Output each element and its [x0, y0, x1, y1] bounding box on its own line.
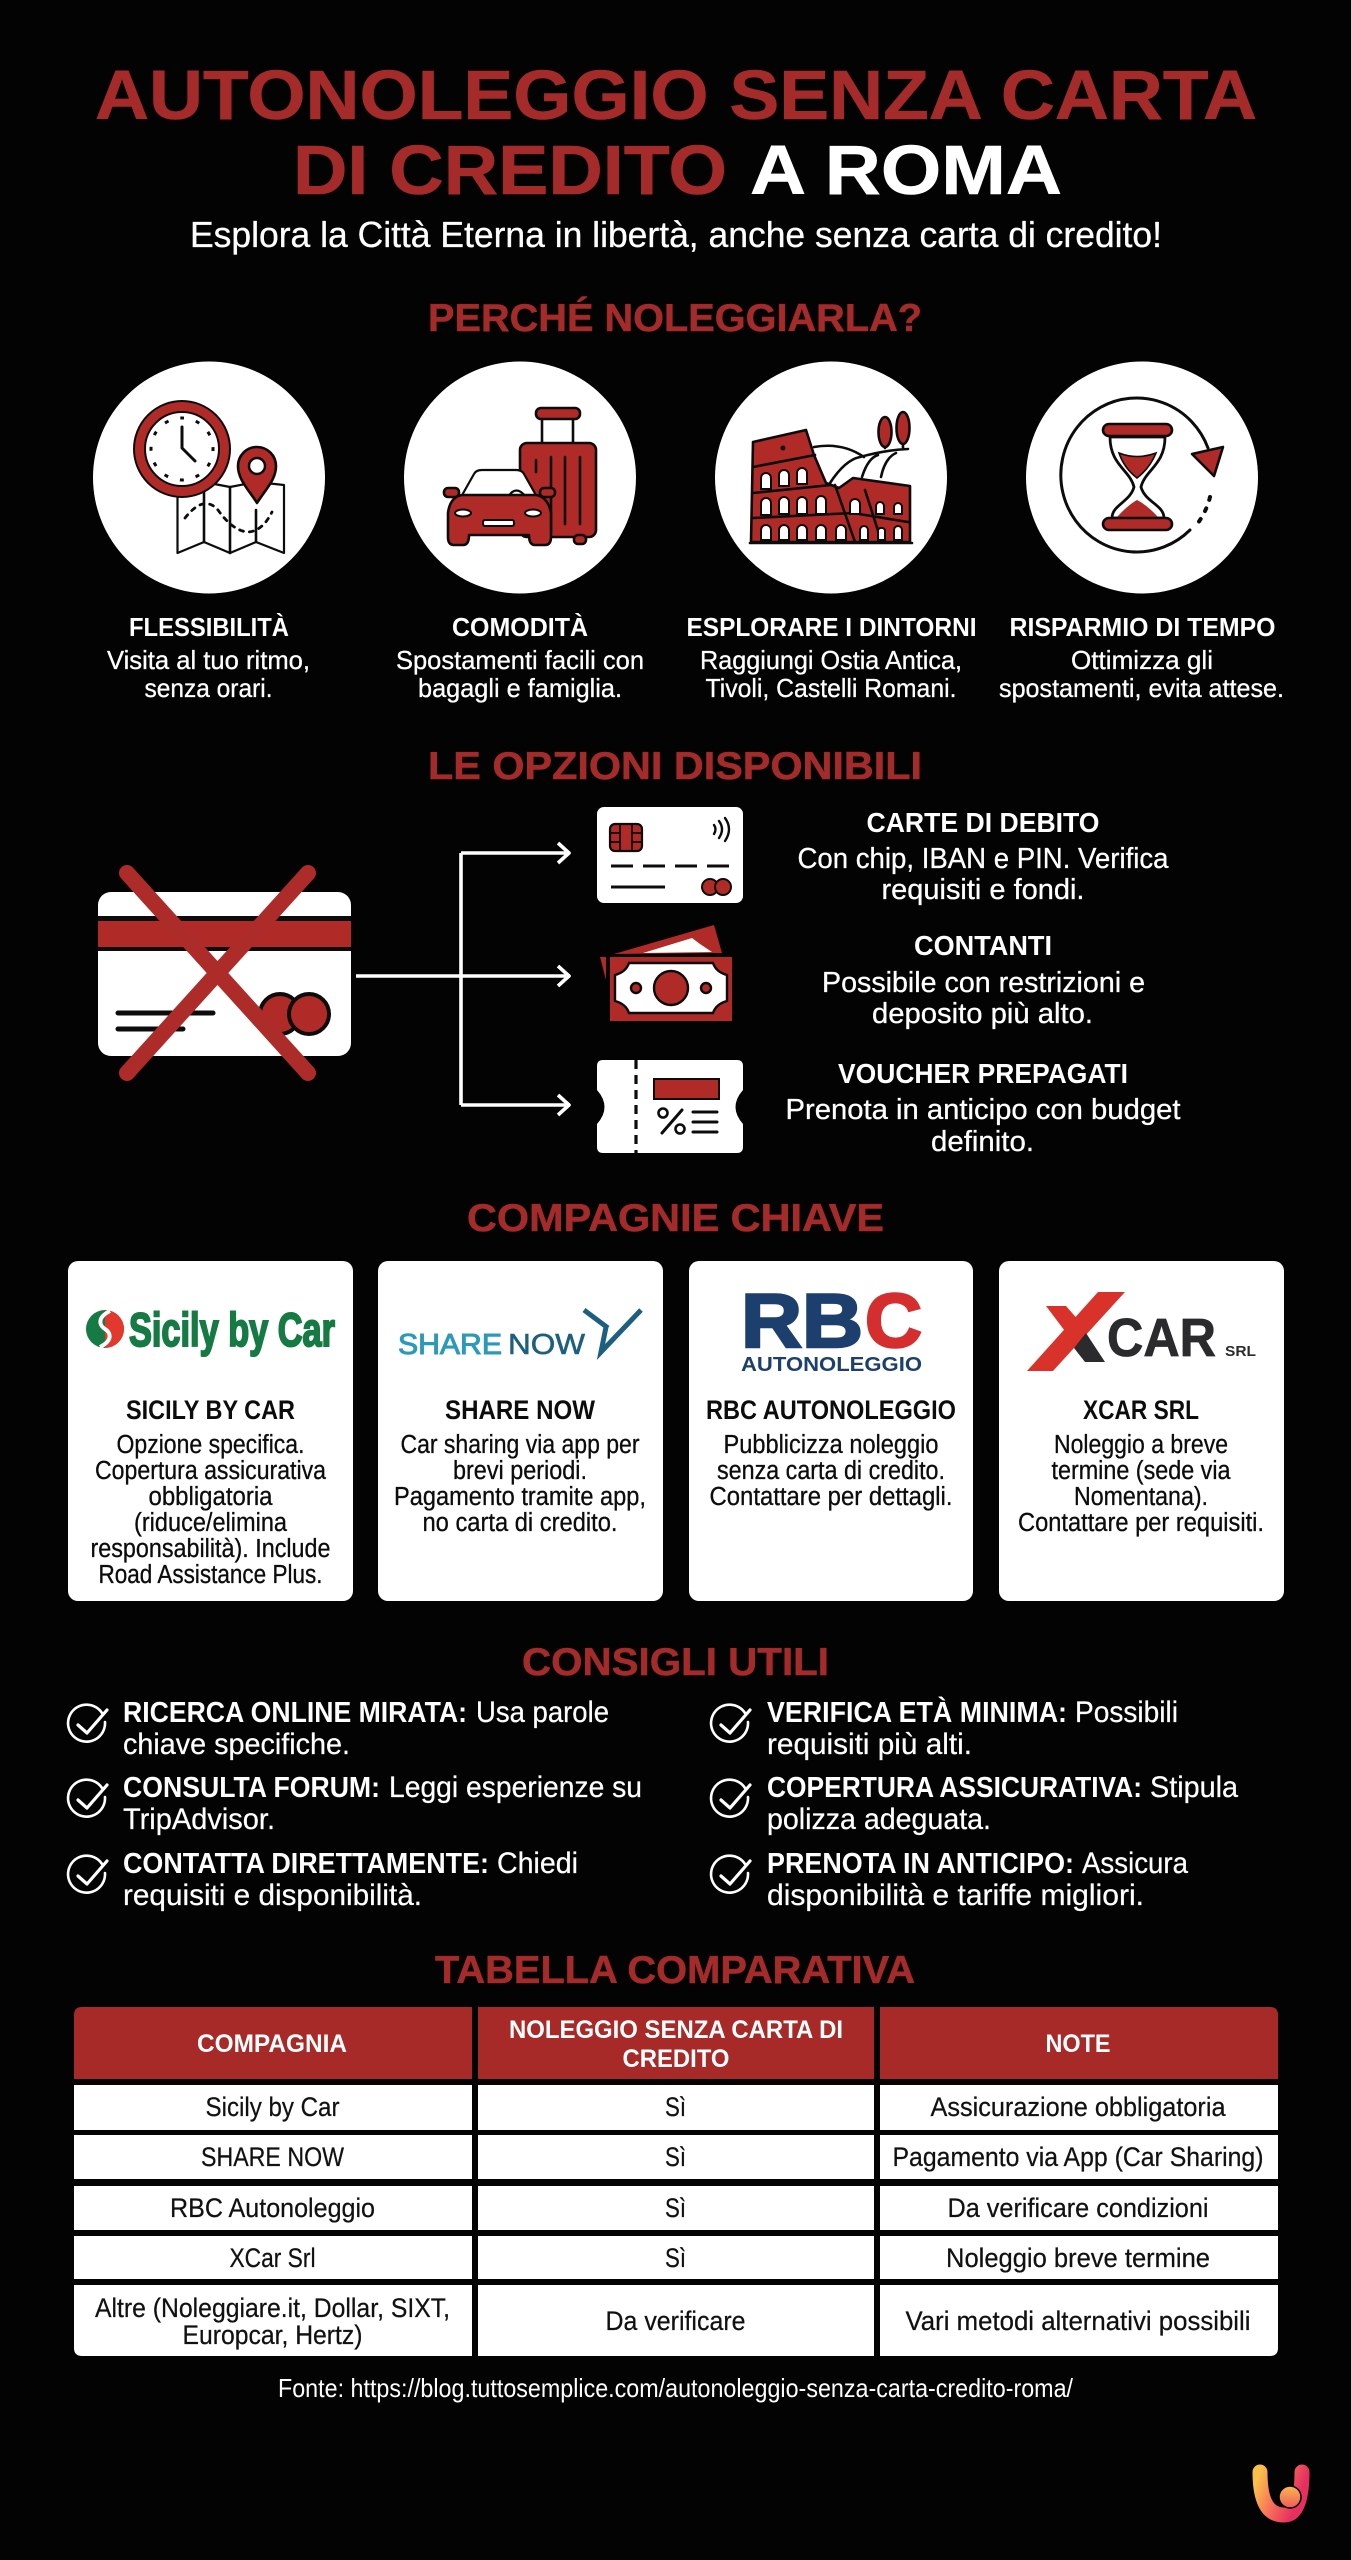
icon: brand logo: [1260, 2472, 1302, 2515]
text: XCar Srl: Contattare per requisiti.: [1018, 1509, 1264, 1537]
text: cash: deposito più alto.: [872, 998, 1093, 1030]
card: Sicily by Car: [68, 1261, 353, 1601]
label: flessibilità: Visita al tuo ritmo,: [107, 645, 310, 675]
text: Sicily by Car: [90, 1395, 330, 1589]
row: RBC Autonoleggio: [74, 2186, 1278, 2230]
icon: crossed-out credit card: [98, 873, 351, 1073]
text: Share Now: [394, 1395, 646, 1537]
icon: car and suitcase: [404, 362, 636, 594]
arrows: card to options: [356, 843, 569, 1115]
tip: contatta direttamente: CONTATTA DIRETTAMENTE:: [123, 1848, 489, 1880]
tip: consulta forum: CONSULTA FORUM:: [123, 1772, 380, 1804]
logo: RBC Autonoleggio: C: [865, 1279, 922, 1364]
row: altre compagnie: Vari metodi alternativi possibili: [906, 2306, 1250, 2336]
label: comodità: [396, 612, 644, 703]
row: XCar Srl: Noleggio breve termine: [946, 2243, 1210, 2273]
logo: XCar Srl: [1027, 1292, 1256, 1371]
row: altre compagnie: Altre (Noleggiare.it, Dollar, SIXT,: [95, 2293, 450, 2323]
title: [95, 56, 1257, 209]
label: comodità: Spostamenti facili con: [396, 645, 644, 675]
logo: Share Now: NOW: [508, 1329, 586, 1361]
text: Sicily by Car: SICILY BY CAR: [126, 1395, 295, 1425]
label: flessibilità: FLESSIBILITÀ: [129, 612, 289, 642]
logo: XCar Srl: SRL: [1225, 1343, 1256, 1360]
logo: Sicily by Car: Sicily by Car: [129, 1303, 335, 1356]
panel: comodità: [396, 362, 644, 703]
label: risparmio di tempo: [999, 612, 1284, 703]
text: RBC Autonoleggio: senza carta di credito.: [717, 1457, 945, 1485]
text: XCar Srl: Noleggio a breve: [1054, 1431, 1228, 1459]
logo: Share Now: SHARE: [398, 1329, 502, 1361]
logo: RBC Autonoleggio: AUTONOLEGGIO: [741, 1354, 922, 1376]
row: XCar Srl: XCar Srl: [230, 2243, 316, 2273]
tip: prenota in anticipo: disponibilità e tariffe migliori.: [767, 1879, 1144, 1912]
text: Sicily by Car: (riduce/elimina: [134, 1509, 288, 1537]
option: prepaid vouchers: [597, 1058, 1180, 1158]
row: XCar Srl: [74, 2236, 1278, 2279]
label: risparmio di tempo: spostamenti, evita attese.: [999, 673, 1284, 703]
tip: verifica età minima: Possibili: [1075, 1696, 1178, 1729]
heading: consigli utili: CONSIGLI UTILI: [522, 1641, 829, 1684]
text: RBC Autonoleggio: Contattare per dettagli.: [710, 1483, 952, 1511]
card: Share Now: [378, 1261, 663, 1601]
label: flessibilità: senza orari.: [144, 673, 272, 703]
row: RBC Autonoleggio: RBC Autonoleggio: [170, 2193, 375, 2223]
row: Sicily by Car: Sicily by Car: [206, 2092, 340, 2122]
row: Share Now: Pagamento via App (Car Sharing): [892, 2142, 1264, 2172]
heading: perché noleggiarla: PERCHÉ NOLEGGIARLA?: [428, 296, 922, 340]
text: XCar Srl: [1018, 1395, 1264, 1537]
text: cash: [822, 930, 1145, 1030]
row: Sicily by Car: Sì: [665, 2092, 686, 2122]
panel: flessibilità: [93, 362, 325, 703]
text: cash: CONTANTI: [914, 930, 1052, 961]
row: Sicily by Car: Assicurazione obbligatoria: [930, 2092, 1226, 2122]
tip: contatta direttamente: requisiti e disponibilità.: [123, 1879, 422, 1912]
label: flessibilità: [107, 612, 310, 703]
panel: risparmio di tempo: [999, 362, 1284, 703]
text: debit cards: Con chip, IBAN e PIN. Verifica: [798, 843, 1169, 875]
text: Sicily by Car: responsabilità). Include: [90, 1535, 330, 1563]
title: AUTONOLEGGIO SENZA CARTA: [95, 56, 1257, 134]
text: Share Now: Pagamento tramite app,: [394, 1483, 646, 1511]
row: XCar Srl: Sì: [665, 2243, 686, 2273]
row: Share Now: [74, 2135, 1278, 2179]
text: Sicily by Car: Copertura assicurativa: [95, 1457, 327, 1485]
label: esplorare i dintorni: Tivoli, Castelli Romani.: [706, 673, 956, 703]
table header: CREDITO: [622, 2045, 730, 2073]
source line: Fonte: https://blog.tuttosemplice.com/autonoleggio-senza-carta-credito-roma/: [278, 2373, 1074, 2403]
tip: ricerca online mirata: Usa parole: [476, 1696, 609, 1729]
tip: prenota in anticipo: [711, 1847, 1188, 1912]
text: RBC Autonoleggio: [706, 1395, 956, 1511]
text: XCar Srl: termine (sede via: [1052, 1457, 1231, 1485]
title: A ROMA: [750, 131, 1062, 209]
heading: le opzioni disponibili: LE OPZIONI DISPONIBILI: [428, 745, 922, 788]
text: Share Now: Car sharing via app per: [400, 1431, 640, 1459]
label: comodità: bagagli e famiglia.: [418, 673, 622, 703]
logo: RBC Autonoleggio: RB: [741, 1279, 863, 1364]
logo: XCar Srl: CAR: [1107, 1308, 1216, 1368]
panel: esplorare i dintorni: [686, 362, 976, 703]
option: cash: [600, 925, 1145, 1030]
text: debit cards: [798, 807, 1169, 906]
tip: consulta forum: TripAdvisor.: [123, 1803, 275, 1836]
text: RBC Autonoleggio: RBC AUTONOLEGGIO: [706, 1395, 956, 1425]
tip: consulta forum: [68, 1771, 642, 1836]
tip: contatta direttamente: Chiedi: [497, 1847, 578, 1880]
logo: RBC Autonoleggio: [741, 1279, 922, 1376]
tip: verifica età minima: VERIFICA ETÀ MINIMA:: [767, 1695, 1067, 1729]
row: altre compagnie: Da verificare: [606, 2306, 746, 2336]
label: risparmio di tempo: RISPARMIO DI TEMPO: [1010, 612, 1276, 642]
icon: hourglass: [1026, 362, 1258, 594]
card: RBC Autonoleggio: [689, 1261, 973, 1601]
icon: colosseum: [715, 362, 947, 594]
tip: ricerca online mirata: chiave specifiche.: [123, 1728, 350, 1761]
logo: Sicily by Car: [86, 1303, 335, 1356]
icon: clock and map: [93, 362, 325, 594]
text: debit cards: CARTE DI DEBITO: [866, 807, 1100, 838]
heading: compagnie chiave: COMPAGNIE CHIAVE: [467, 1197, 884, 1240]
text: Sicily by Car: Road Assistance Plus.: [98, 1561, 322, 1589]
text: debit cards: requisiti e fondi.: [882, 874, 1084, 906]
option: debit cards: [597, 807, 1169, 906]
tip: copertura assicurativa: polizza adeguata.: [767, 1803, 991, 1836]
text: Share Now: brevi periodi.: [453, 1457, 587, 1485]
row: altre compagnie: [74, 2285, 1278, 2356]
text: RBC Autonoleggio: Pubblicizza noleggio: [724, 1431, 938, 1459]
text: Sicily by Car: obbligatoria: [148, 1483, 273, 1511]
tip: prenota in anticipo: PRENOTA IN ANTICIPO:: [767, 1848, 1074, 1880]
text: cash: Possibile con restrizioni e: [822, 967, 1145, 999]
label: esplorare i dintorni: [686, 612, 976, 703]
tip: copertura assicurativa: COPERTURA ASSICURATIVA:: [767, 1772, 1142, 1804]
table header: NOLEGGIO SENZA CARTA DI: [509, 2016, 843, 2044]
text: Share Now: SHARE NOW: [445, 1395, 595, 1425]
text: Share Now: no carta di credito.: [422, 1509, 618, 1537]
tip: consulta forum: Leggi esperienze su: [389, 1771, 642, 1804]
row: Sicily by Car: [74, 2085, 1278, 2130]
text: prepaid vouchers: Prenota in anticipo con budget: [786, 1094, 1180, 1126]
logo: Share Now: [398, 1310, 641, 1361]
tip: verifica età minima: requisiti più alti.: [767, 1728, 972, 1761]
row: Share Now: SHARE NOW: [201, 2142, 344, 2172]
title: DI CREDITO: [293, 131, 727, 209]
row: Share Now: Sì: [665, 2142, 686, 2172]
tip: copertura assicurativa: Stipula: [1150, 1771, 1238, 1804]
label: esplorare i dintorni: ESPLORARE I DINTORNI: [686, 612, 976, 642]
tip: prenota in anticipo: Assicura: [1082, 1847, 1188, 1880]
text: prepaid vouchers: [786, 1058, 1180, 1158]
label: risparmio di tempo: Ottimizza gli: [1071, 645, 1213, 675]
row: altre compagnie: Europcar, Hertz): [182, 2320, 362, 2350]
text: XCar Srl: XCAR SRL: [1083, 1395, 1199, 1425]
label: esplorare i dintorni: Raggiungi Ostia Antica,: [700, 645, 962, 675]
tip: copertura assicurativa: [711, 1771, 1238, 1836]
icon: debit card: [597, 807, 743, 903]
text: prepaid vouchers: definito.: [931, 1126, 1034, 1158]
row: RBC Autonoleggio: Sì: [665, 2193, 686, 2223]
label: comodità: COMODITÀ: [452, 612, 588, 642]
icon: voucher: [597, 1060, 743, 1153]
text: prepaid vouchers: VOUCHER PREPAGATI: [838, 1058, 1128, 1089]
card: XCar Srl: [999, 1261, 1284, 1601]
heading: tabella comparativa: TABELLA COMPARATIVA: [435, 1949, 915, 1992]
row: RBC Autonoleggio: Da verificare condizioni: [948, 2193, 1208, 2223]
icon: banknotes: [600, 925, 732, 1021]
comparison table: [74, 2007, 1278, 2356]
tip: ricerca online mirata: [68, 1696, 609, 1761]
table header: NOTE: [1046, 2030, 1110, 2058]
tip: contatta direttamente: [68, 1847, 578, 1912]
text: XCar Srl: Nomentana).: [1074, 1483, 1208, 1511]
table header: [74, 2007, 1278, 2079]
text: Sicily by Car: Opzione specifica.: [116, 1431, 304, 1459]
tip: ricerca online mirata: RICERCA ONLINE MIRATA:: [123, 1697, 467, 1729]
table header: COMPAGNIA: [197, 2030, 347, 2058]
subtitle: Esplora la Città Eterna in libertà, anche senza carta di credito!: [190, 214, 1162, 255]
tip: verifica età minima: [711, 1695, 1178, 1761]
